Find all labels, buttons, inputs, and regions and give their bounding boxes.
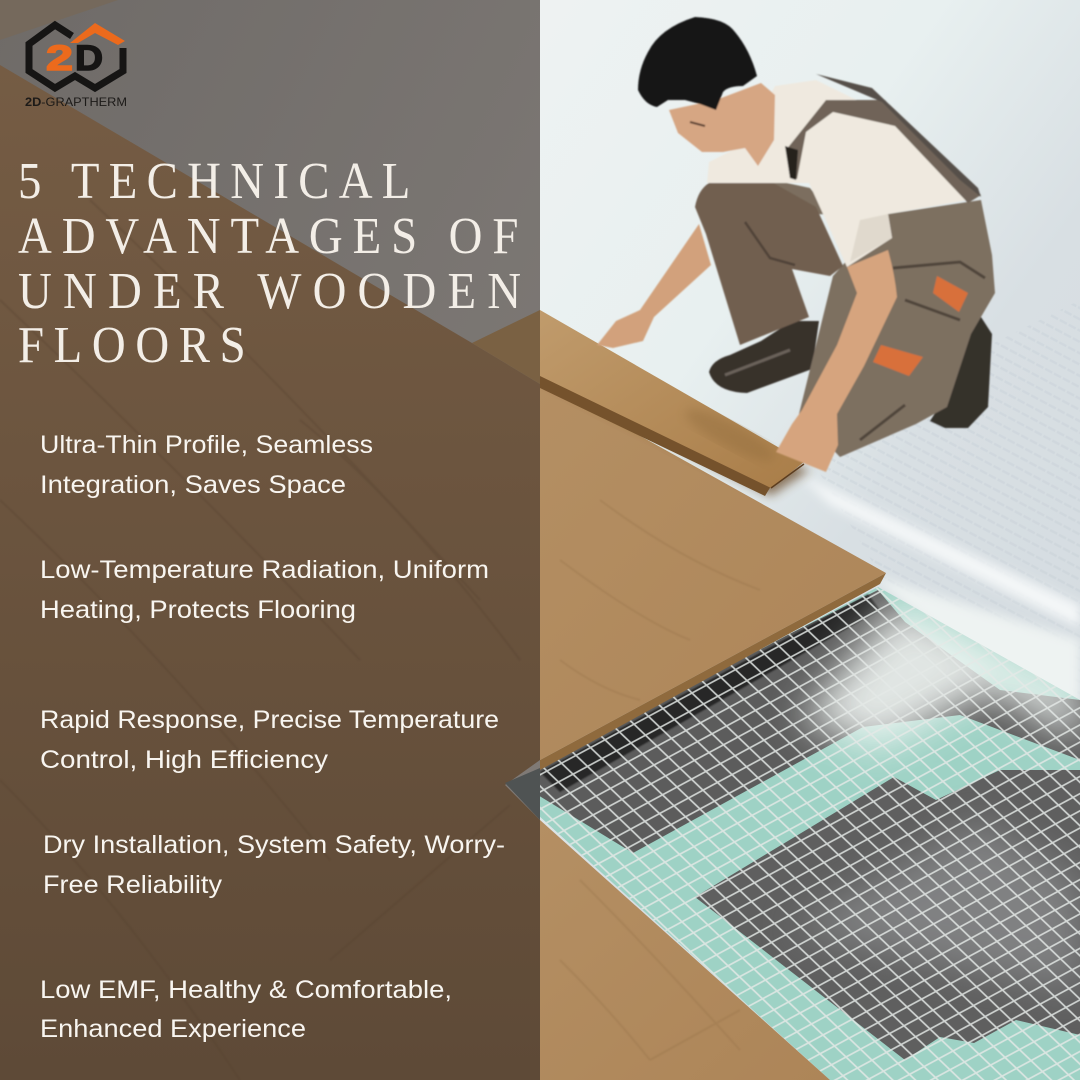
installer figure xyxy=(597,17,995,472)
front leg xyxy=(695,176,843,345)
advantage 5 text: Low EMF, Healthy & Comfortable, xyxy=(40,976,452,1004)
panel: dark translucent overlay over the left half xyxy=(0,0,540,1080)
advantage 5 text xyxy=(40,976,452,1043)
neck and face xyxy=(669,83,775,166)
advantage 2 text xyxy=(40,556,489,624)
logo letter D: D xyxy=(75,39,103,78)
advantage 4 text xyxy=(43,831,505,899)
graphite film, back strip xyxy=(505,590,1080,853)
graphite film, front strip xyxy=(695,770,1080,1060)
plank being laid xyxy=(540,310,810,496)
logo: 2D-Graptherm hexagon mark xyxy=(25,23,127,109)
rear boot xyxy=(930,317,992,428)
advantage 1 text: Ultra-Thin Profile, Seamless xyxy=(40,431,373,459)
heating layer: teal underlay, graphite film and mesh xyxy=(500,580,1080,1080)
overall straps xyxy=(786,100,981,203)
title xyxy=(18,152,521,374)
logo wordmark: 2D-GRAPTHERM xyxy=(25,95,127,109)
white t-shirt xyxy=(707,80,968,267)
logo hexagon outline xyxy=(29,25,123,88)
front boot xyxy=(709,321,819,393)
advantage 2 text: Heating, Protects Flooring xyxy=(40,596,356,624)
logo orange roof xyxy=(70,23,125,45)
advantage 3 text xyxy=(40,706,499,774)
advantage 4 text: Free Reliability xyxy=(43,871,223,899)
advantage 3 text: Rapid Response, Precise Temperature xyxy=(40,706,499,734)
wood grain xyxy=(560,500,760,1060)
title: FLOORS xyxy=(18,316,246,374)
title: UNDER WOODEN xyxy=(18,262,521,320)
hair xyxy=(638,17,757,110)
advantage 5 text: Enhanced Experience xyxy=(40,1015,306,1043)
installed wood floor xyxy=(540,380,886,760)
underlay floor xyxy=(540,0,1080,1080)
photo: installer laying wood flooring over heating film xyxy=(500,0,1080,1080)
orange knee patch xyxy=(873,345,923,376)
right arm xyxy=(776,250,897,472)
orange hip patch xyxy=(933,276,968,312)
title: ADVANTAGES OF xyxy=(18,207,518,265)
advantage 4 text: Dry Installation, System Safety, Worry- xyxy=(43,831,505,859)
overall bib xyxy=(750,176,832,215)
advantage 2 text: Low-Temperature Radiation, Uniform xyxy=(40,556,489,584)
advantage 3 text: Control, High Efficiency xyxy=(40,746,329,774)
advantage 1 text xyxy=(40,431,373,499)
logo letter 2: 2 xyxy=(46,39,73,78)
left arm xyxy=(597,224,711,348)
title: 5 TECHNICAL xyxy=(18,152,410,210)
advantage 1 text: Integration, Saves Space xyxy=(40,471,346,499)
lower wood floor xyxy=(540,820,830,1080)
overalls body xyxy=(799,200,995,457)
